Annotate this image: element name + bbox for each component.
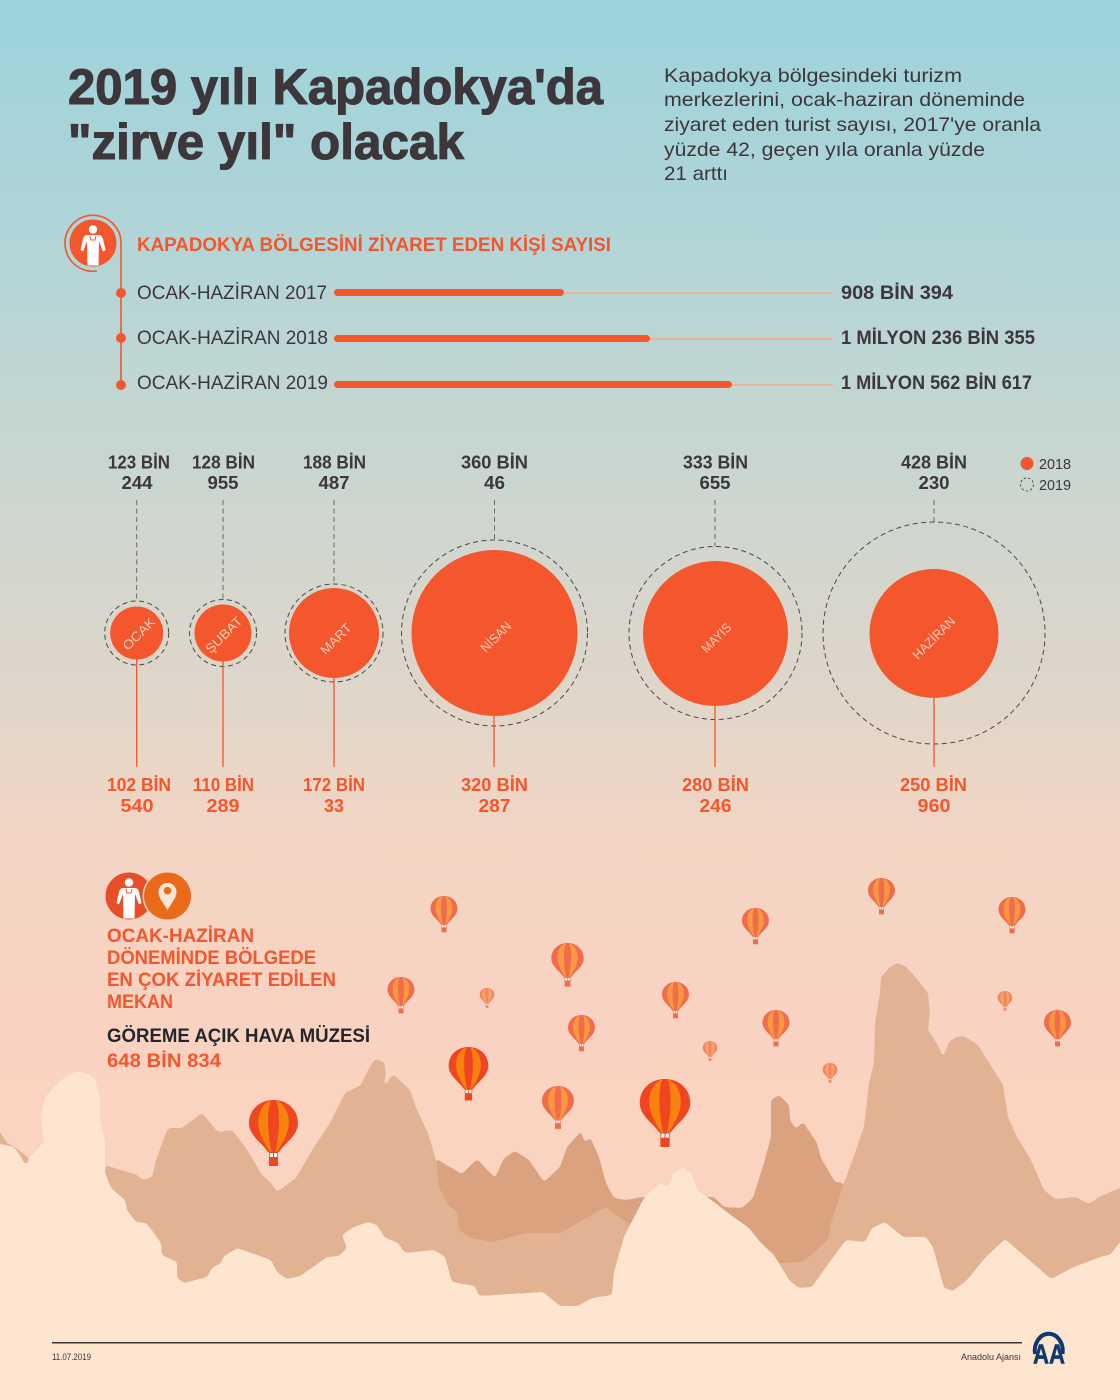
heading: MEKAN — [107, 992, 173, 1013]
row 2019: 1 MİLYON 562 BİN 617 — [841, 373, 1032, 394]
rock: far left sliver — [0, 1105, 29, 1175]
source: Anadolu Ajansı — [961, 1352, 1021, 1362]
rock: cream foreground — [0, 1071, 1120, 1400]
landscape: rock formations — [0, 963, 1120, 1400]
ocak: 540 — [120, 796, 154, 816]
chart: monthly bubbles — [105, 452, 1045, 816]
section heading: KAPADOKYA BÖLGESİNİ ZİYARET EDEN KİŞİ SAYISI — [137, 235, 611, 256]
subat: 289 — [206, 796, 240, 816]
haziran: HAZİRAN — [909, 613, 958, 662]
heading: OCAK-HAZİRAN — [107, 926, 254, 947]
place value: 648 BİN 834 — [107, 1051, 221, 1072]
row 2018: 1 MİLYON 236 BİN 355 — [841, 328, 1035, 349]
mart: 188 BİN — [303, 452, 366, 472]
intro text: 21 arttı — [664, 163, 728, 185]
row 2017: 908 BİN 394 — [841, 283, 953, 304]
mayis — [629, 452, 802, 816]
title — [68, 59, 604, 170]
mart: MART — [317, 620, 355, 658]
balloons: far — [480, 988, 1012, 1083]
icon: location pin — [142, 871, 192, 921]
subat: ŞUBAT — [202, 613, 245, 656]
subat: 128 BİN — [192, 452, 255, 472]
rock: dark middle layer — [436, 1095, 844, 1263]
mart: 33 — [324, 796, 344, 816]
intro text: yüzde 42, geçen yıla oranla yüzde — [664, 139, 985, 161]
icon: visitor — [106, 872, 152, 920]
legend — [1020, 456, 1071, 494]
panel: visitor totals — [65, 215, 1035, 394]
nisan: 287 — [478, 796, 510, 816]
logo: AA — [1033, 1338, 1065, 1370]
ocak — [105, 452, 171, 816]
mart: 172 BİN — [303, 775, 365, 795]
place name: GÖREME AÇIK HAVA MÜZESİ — [107, 1026, 370, 1047]
intro text: merkezlerini, ocak-haziran döneminde — [664, 89, 1025, 111]
legend: 2019 — [1039, 477, 1071, 494]
nisan: 46 — [484, 473, 505, 493]
intro text: Kapadokya bölgesindeki turizm — [664, 65, 962, 87]
mayis: 246 — [700, 796, 732, 816]
icon: visitor — [70, 220, 116, 266]
footer — [52, 1334, 1065, 1370]
row 2019 — [116, 373, 1032, 394]
legend: 2018 — [1039, 456, 1071, 473]
heading: DÖNEMİNDE BÖLGEDE — [107, 948, 316, 969]
mayis: 280 BİN — [682, 775, 749, 795]
row 2019: OCAK-HAZİRAN 2019 — [137, 373, 328, 394]
row 2017 — [116, 283, 953, 304]
heading: EN ÇOK ZİYARET EDİLEN — [107, 970, 336, 991]
intro text: ziyaret eden turist sayısı, 2017'ye oranla — [664, 114, 1041, 136]
row 2018: OCAK-HAZİRAN 2018 — [137, 328, 328, 349]
rock: mid left — [105, 1059, 640, 1320]
balloons: middle distance — [388, 878, 1071, 1129]
title: "zirve yıl" olacak — [68, 114, 464, 170]
nisan: 360 BİN — [461, 452, 528, 472]
mayis: 655 — [700, 473, 730, 493]
haziran: 250 BİN — [900, 775, 967, 795]
subat: 110 BİN — [193, 775, 254, 795]
nisan: NİSAN — [477, 618, 514, 655]
ocak: 123 BİN — [108, 452, 170, 472]
ocak: OCAK — [119, 614, 159, 653]
rock: mid right — [770, 963, 1120, 1400]
balloons: near — [249, 1047, 690, 1166]
ocak: 102 BİN — [107, 775, 171, 795]
haziran: 960 — [918, 796, 950, 816]
mayis: 333 BİN — [683, 452, 748, 472]
heading — [107, 926, 336, 1013]
mart: 487 — [318, 473, 350, 493]
nisan — [402, 452, 588, 816]
nisan: 320 BİN — [461, 775, 528, 795]
mayis: MAYIS — [698, 620, 735, 656]
title: 2019 yılı Kapadokya'da — [68, 59, 604, 115]
intro text — [664, 65, 1041, 185]
ocak: 244 — [122, 473, 152, 493]
haziran: 428 BİN — [901, 452, 967, 472]
subat: 955 — [208, 473, 238, 493]
row 2018 — [116, 328, 1035, 349]
panel: most visited place — [106, 871, 370, 1072]
mart — [285, 452, 383, 816]
timeline with ring — [65, 215, 121, 385]
date: 11.07.2019 — [52, 1352, 91, 1362]
row 2017: OCAK-HAZİRAN 2017 — [137, 283, 327, 304]
haziran — [823, 452, 1045, 816]
subat — [190, 452, 256, 816]
haziran: 230 — [918, 473, 950, 493]
